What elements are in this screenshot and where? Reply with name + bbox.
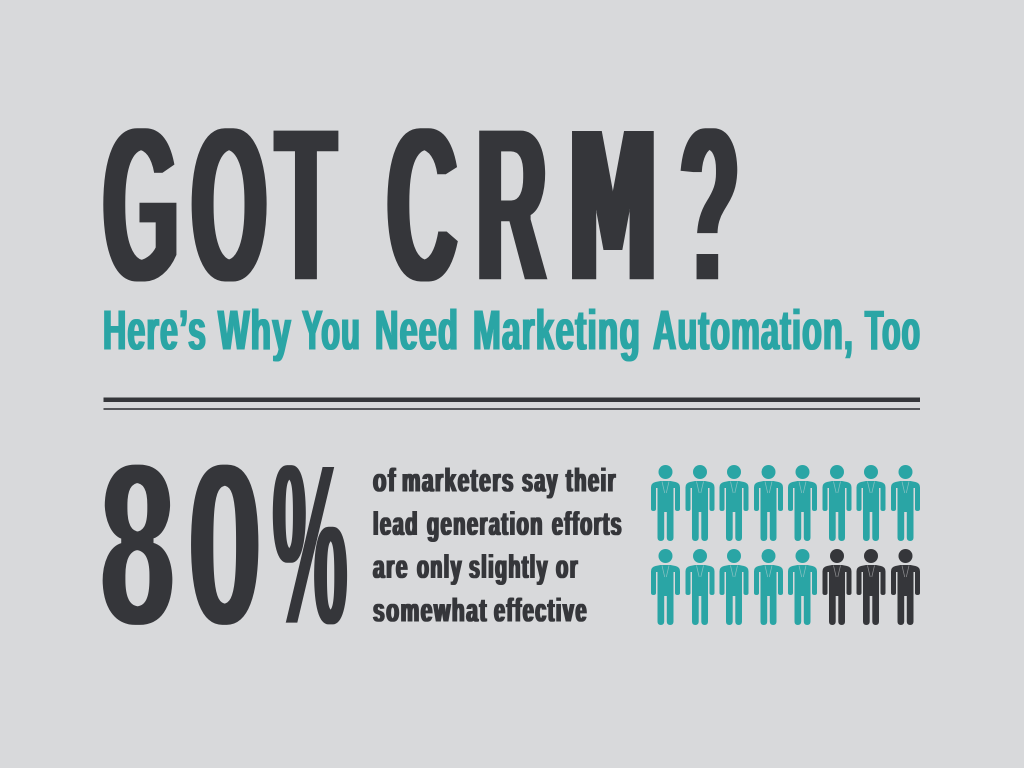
subtitle: Need bbox=[375, 298, 459, 362]
row 1: teal people bbox=[651, 465, 920, 541]
double divider bbox=[104, 398, 920, 410]
line 1: say bbox=[522, 462, 559, 498]
row 2: dark people bbox=[822, 549, 920, 625]
line 3: only bbox=[417, 548, 463, 585]
big statistic: 80%: 80 bbox=[100, 416, 262, 675]
line 3: slightly bbox=[469, 548, 549, 585]
subtitle: You bbox=[302, 298, 361, 362]
line 2: efforts bbox=[552, 505, 623, 542]
line 3: or bbox=[556, 548, 579, 585]
line 2: generation bbox=[427, 505, 544, 542]
line 1: marketers bbox=[402, 462, 515, 498]
subtitle: Automation, bbox=[653, 298, 854, 362]
row 2: teal people bbox=[651, 549, 817, 625]
subtitle: Here’s bbox=[103, 298, 207, 362]
subtitle: Too bbox=[865, 298, 921, 362]
line 1: of bbox=[373, 462, 397, 498]
line 4: effective bbox=[494, 592, 588, 628]
title: GOT CRM? bbox=[103, 82, 739, 332]
line 1: their bbox=[566, 462, 617, 498]
subtitle: Marketing bbox=[473, 298, 641, 362]
line 2: lead bbox=[373, 505, 419, 542]
line 3: are bbox=[373, 548, 409, 585]
big statistic: 80% bbox=[100, 414, 347, 675]
subtitle: Why bbox=[218, 298, 292, 362]
line 4: somewhat bbox=[373, 592, 488, 628]
subtitle bbox=[103, 298, 921, 362]
pictogram: 13 of 16 teal people bbox=[651, 465, 920, 625]
statistic description bbox=[373, 462, 623, 628]
big statistic: 80%: % bbox=[273, 414, 347, 674]
line 3 bbox=[373, 548, 579, 585]
